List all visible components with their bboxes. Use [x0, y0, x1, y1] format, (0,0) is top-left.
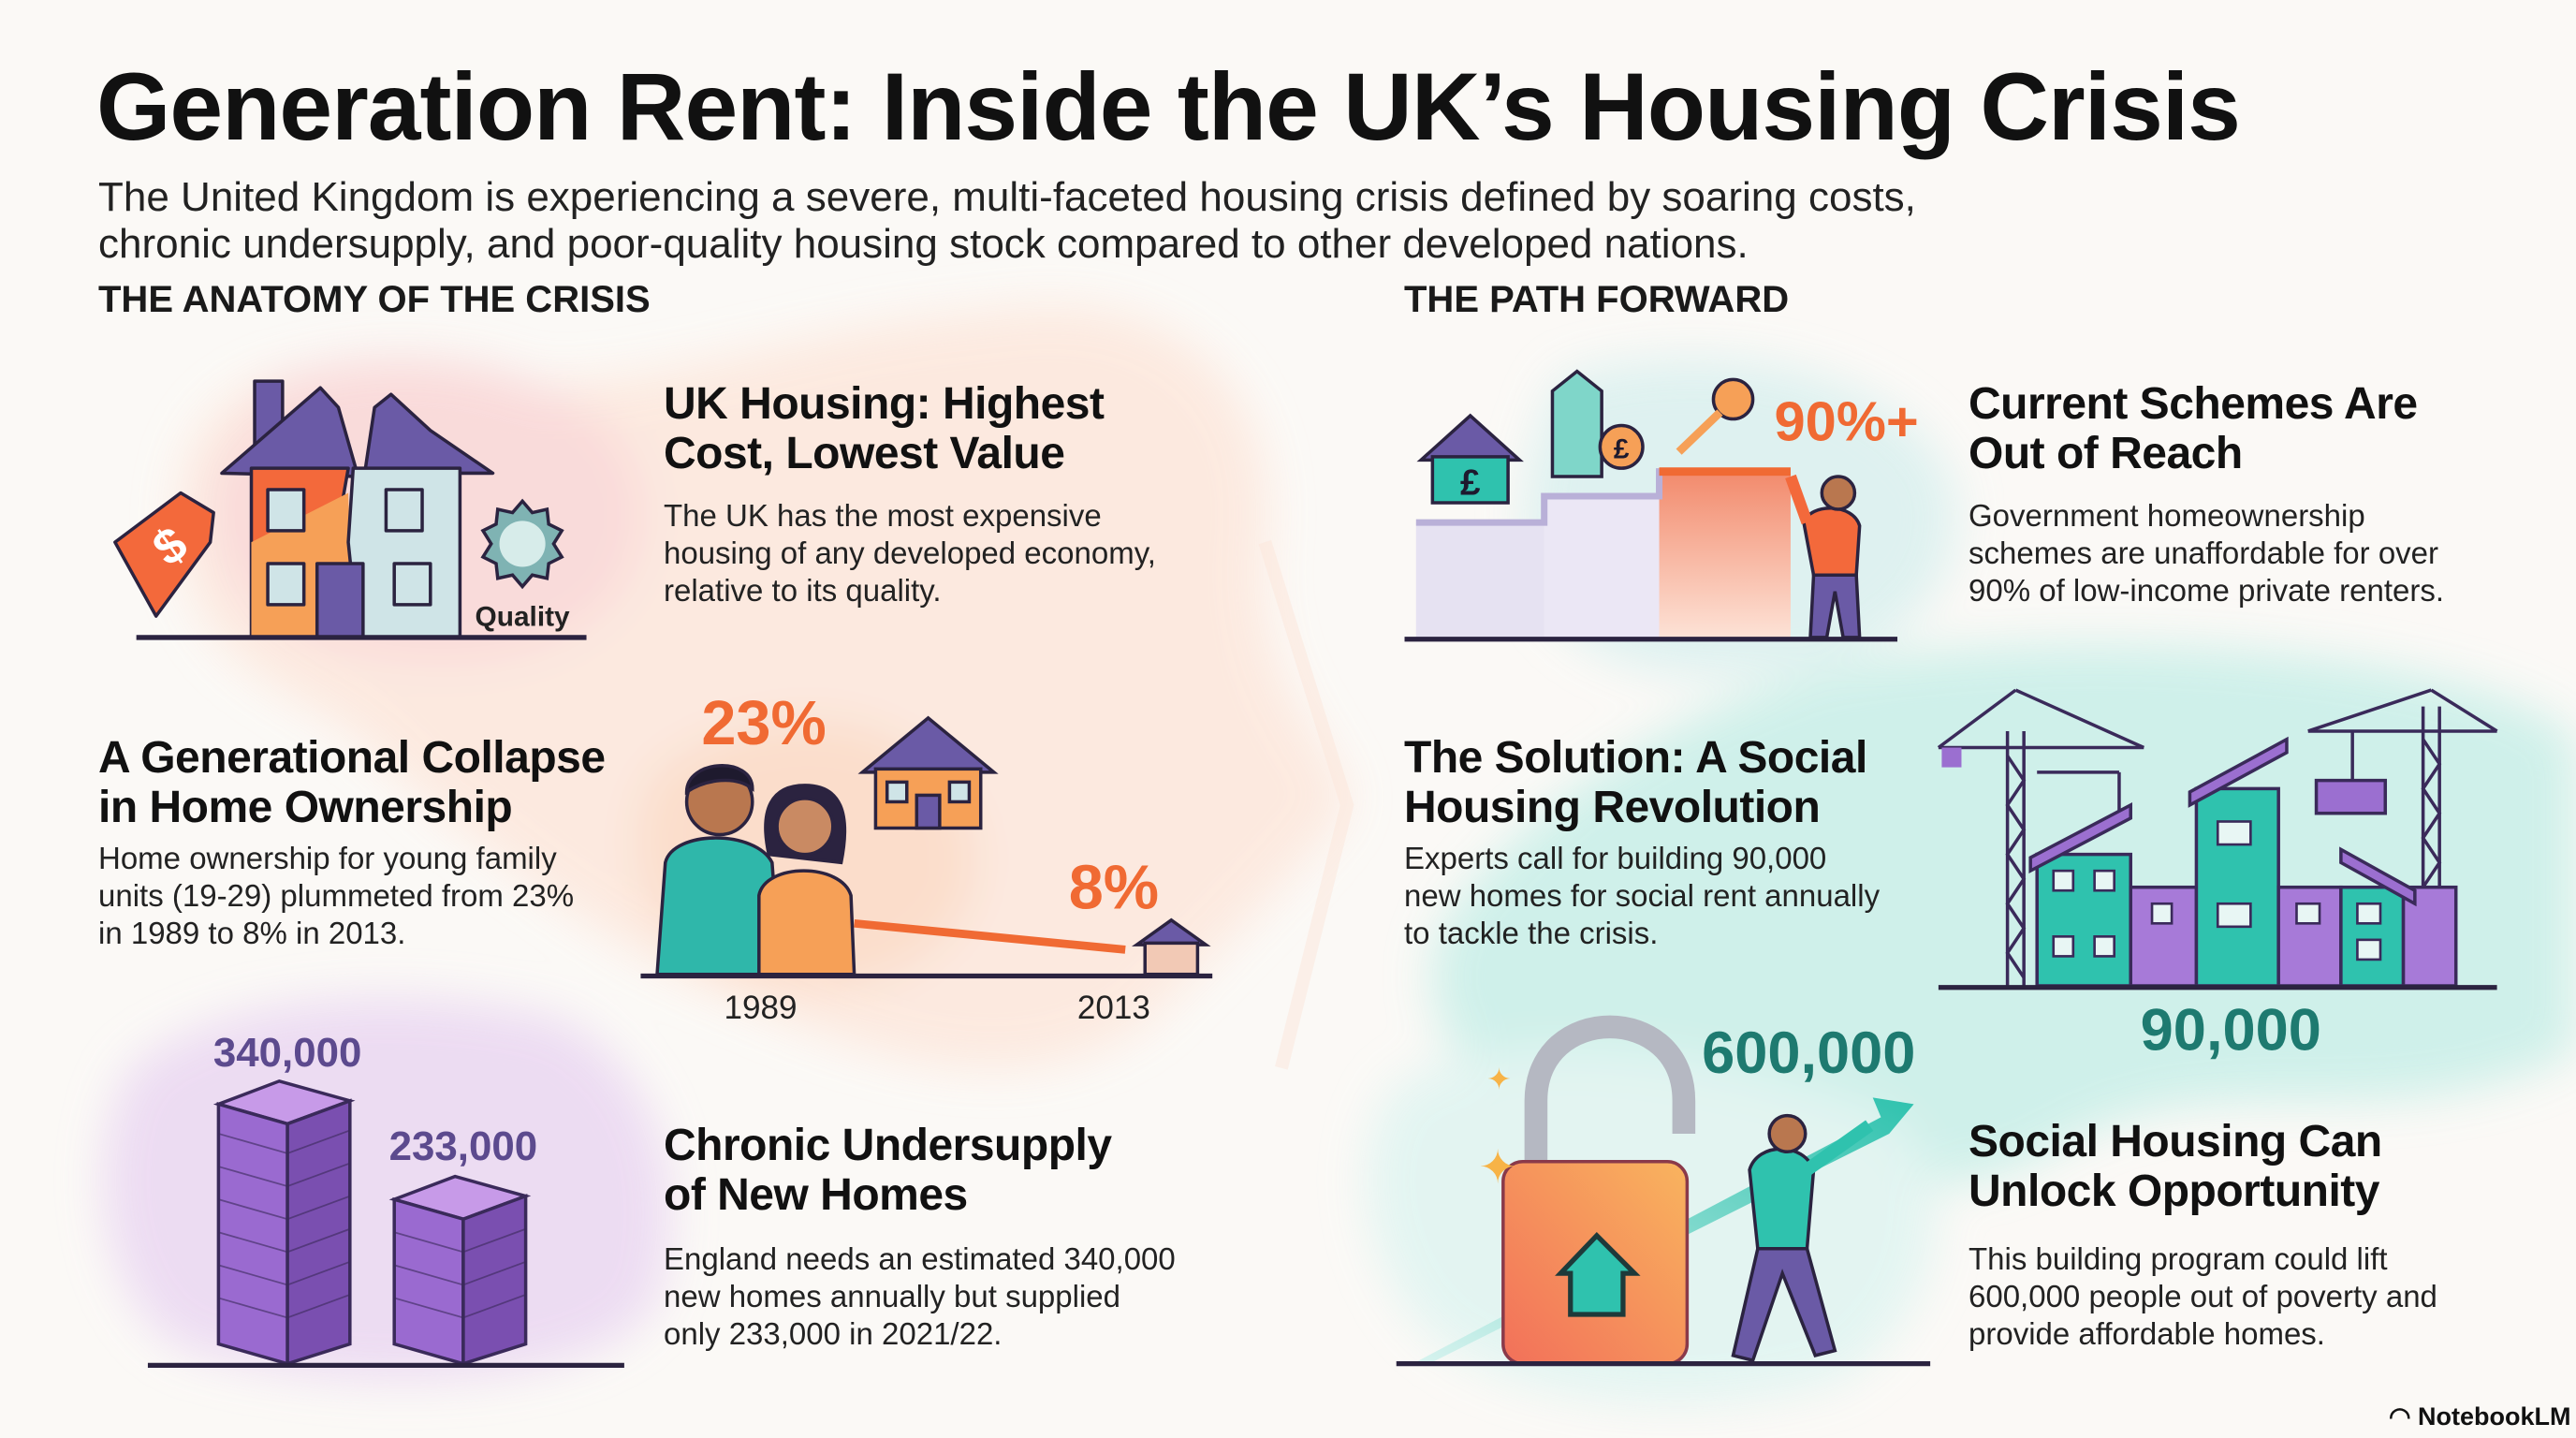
title: Generation Rent: Inside the UK’s Housing Crisis	[96, 53, 2240, 160]
panel: undersupply: Chronic Undersupply	[664, 1121, 1112, 1170]
icon: cranes and social housing: 90,000	[2141, 997, 2321, 1063]
panel: solution: to tackle the crisis.	[1404, 916, 1658, 950]
background and illustrations: Quality	[476, 602, 570, 633]
panel: undersupply: of New Homes	[664, 1170, 968, 1220]
panel: generational collapse: in Home Ownership	[98, 783, 512, 832]
icon: unlocked padlock with person: ✦	[1478, 1140, 1517, 1195]
panel: solution	[1404, 733, 1880, 950]
panel: unlock opportunity: 600,000 people out of poverty and	[1969, 1279, 2437, 1313]
panel: schemes out of reach: Current Schemes Are	[1969, 379, 2418, 429]
chart: home ownership decline: 8%	[1069, 854, 1159, 923]
chart: home ownership decline: 2013	[1077, 990, 1150, 1026]
panel: unlock opportunity: Social Housing Can	[1969, 1117, 2382, 1167]
section heading: anatomy: THE ANATOMY OF THE CRISIS	[98, 279, 651, 320]
logo: NotebookLM: ◠ NotebookLM	[2389, 1402, 2571, 1431]
panel: unlock opportunity	[1969, 1117, 2437, 1351]
icon: unlocked padlock with person	[1397, 1020, 1930, 1364]
icon: unlocked padlock with person: ✦	[1486, 1064, 1512, 1097]
panel: undersupply: new homes annually but supplied	[664, 1279, 1120, 1313]
icon: stairs to homeownership	[1405, 372, 1919, 639]
panel: generational collapse	[98, 733, 606, 950]
subtitle	[98, 174, 1916, 267]
panel: highest cost: Cost, Lowest Value	[664, 429, 1064, 478]
icon: stairs to homeownership: 90%+	[1774, 389, 1919, 452]
panel: schemes out of reach: schemes are unaffordable for over	[1969, 536, 2438, 570]
panel: generational collapse: A Generational Collapse	[98, 733, 606, 783]
icon: stairs to homeownership: £	[1614, 434, 1630, 465]
panel: highest cost	[664, 379, 1156, 608]
panel: undersupply: only 233,000 in 2021/22.	[664, 1316, 1002, 1351]
chart: home ownership decline: 1989	[724, 990, 798, 1026]
panel: highest cost: UK Housing: Highest	[664, 379, 1104, 429]
panel: schemes out of reach	[1969, 379, 2444, 608]
subtitle: chronic undersupply, and poor-quality housing stock compared to other developed nations.	[98, 221, 1749, 267]
panel: highest cost: relative to its quality.	[664, 573, 942, 608]
section heading: path forward: THE PATH FORWARD	[1404, 279, 1789, 320]
panel: solution: Housing Revolution	[1404, 783, 1820, 832]
panel: unlock opportunity: provide affordable homes.	[1969, 1316, 2325, 1351]
chart: home ownership decline: 23%	[701, 689, 827, 758]
couple	[657, 766, 855, 975]
panel: unlock opportunity: Unlock Opportunity	[1969, 1167, 2379, 1216]
panel: schemes out of reach: 90% of low-income private renters.	[1969, 573, 2444, 608]
background and illustrations: $	[143, 516, 198, 577]
panel: generational collapse: Home ownership for young family	[98, 841, 557, 875]
subtitle: The United Kingdom is experiencing a severe, multi-faceted housing crisis defined by soaring costs,	[98, 174, 1916, 220]
blobs	[104, 306, 2576, 1403]
panel: schemes out of reach: Government homeownership	[1969, 498, 2365, 533]
panel: generational collapse: in 1989 to 8% in 2013.	[98, 916, 405, 950]
icon: stairs to homeownership: £	[1460, 462, 1481, 503]
panel: highest cost: The UK has the most expensive	[664, 498, 1102, 533]
panel: solution: The Solution: A Social	[1404, 733, 1867, 783]
panel: solution: new homes for social rent annually	[1404, 878, 1880, 913]
bar chart: need vs supply	[148, 1030, 624, 1365]
panel: unlock opportunity: This building program could lift	[1969, 1241, 2388, 1276]
panel: generational collapse: units (19-29) plummeted from 23%	[98, 878, 574, 913]
icon: unlocked padlock with person: 600,000	[1702, 1020, 1915, 1086]
icon: broken house with price tag and quality badge	[115, 381, 492, 638]
panel: solution: Experts call for building 90,000	[1404, 841, 1826, 875]
panel: schemes out of reach: Out of Reach	[1969, 429, 2243, 478]
panel: undersupply	[664, 1121, 1176, 1351]
panel: highest cost: housing of any developed economy,	[664, 536, 1156, 570]
bar chart: need vs supply: 340,000	[213, 1030, 361, 1076]
chart: home ownership decline	[640, 689, 1212, 1026]
icon: cranes and social housing	[1939, 690, 2497, 1063]
panel: undersupply: England needs an estimated 340,000	[664, 1241, 1176, 1276]
bar chart: need vs supply: 233,000	[389, 1123, 537, 1169]
